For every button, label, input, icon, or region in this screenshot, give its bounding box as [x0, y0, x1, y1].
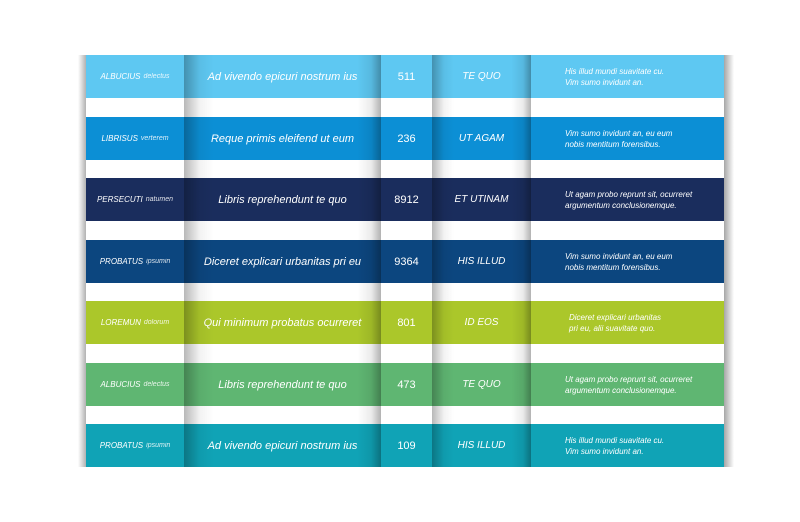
row 2: UT AGAM — [459, 133, 504, 144]
row 1: Vim sumo invidunt an. — [565, 78, 644, 86]
fold shading column 4 — [432, 55, 531, 467]
row 6 — [86, 363, 724, 406]
row 6: delectus — [143, 381, 170, 388]
row 6: 473 — [397, 378, 416, 390]
row 4: Vim sumo invidunt an, eu eum — [565, 252, 672, 260]
row 7 — [86, 424, 724, 467]
row 7: PROBATUS — [100, 441, 143, 450]
row 3: PERSECUTI — [97, 195, 143, 204]
row 3: Libris reprehendunt te quo — [218, 194, 347, 206]
row 1: TE QUO — [462, 71, 501, 82]
row 5: ID EOS — [465, 317, 498, 328]
row 7: HIS ILLUD — [458, 440, 505, 451]
row 7: Vim sumo invidunt an. — [565, 446, 644, 456]
row 5: LOREMUN — [101, 318, 141, 327]
row 5: dolorum — [144, 319, 169, 326]
row 1: His illud mundi suavitate cu. — [565, 66, 664, 76]
shadow left — [78, 55, 86, 467]
row 1: delectus — [143, 73, 170, 80]
row 3: argumentum conclusionemque. — [565, 200, 677, 210]
row 2: 236 — [397, 132, 416, 144]
row 1: 511 — [398, 70, 415, 82]
row 2: verterem — [141, 135, 169, 142]
row 4: ipsumin — [146, 258, 170, 265]
row 2: LIBRISUS — [101, 134, 138, 143]
row 7: ipsumin — [146, 442, 170, 449]
row 4: Diceret explicari urbanitas pri eu — [204, 256, 361, 268]
row 5: Diceret explicari urbanitas — [569, 312, 661, 322]
row 1: Ad vivendo epicuri nostrum ius — [208, 70, 357, 82]
row 7: His illud mundi suavitate cu. — [565, 436, 664, 444]
row 6: TE QUO — [462, 379, 501, 390]
row 6: argumentum conclusionemque. — [565, 386, 677, 394]
row 3: ET UTINAM — [455, 194, 508, 205]
row 5 — [86, 301, 724, 344]
row 4 — [86, 240, 724, 283]
row 2: Vim sumo invidunt an, eu eum — [565, 128, 672, 138]
row 3 — [86, 178, 724, 221]
row 3: 8912 — [394, 194, 419, 206]
shadow right — [724, 55, 734, 467]
row 7: 109 — [397, 440, 416, 452]
row 5: pri eu, alii suavitate quo. — [569, 324, 655, 332]
row 5: Qui minimum probatus ocurreret — [204, 316, 361, 328]
row 4: nobis mentitum forensibus. — [565, 262, 661, 272]
row 6: ALBUCIUS — [100, 380, 140, 389]
row 6: Libris reprehendunt te quo — [218, 378, 347, 390]
row 3: natumen — [146, 196, 173, 203]
fold shading column 2 — [184, 55, 381, 467]
row 3: Ut agam probo reprunt sit, ocurreret — [565, 190, 692, 198]
row 5: 801 — [397, 316, 416, 328]
row 1 — [86, 55, 724, 98]
row 2: nobis mentitum forensibus. — [565, 140, 661, 148]
row 2: Reque primis eleifend ut eum — [211, 132, 354, 144]
row 2 — [86, 117, 724, 160]
row 1: ALBUCIUS — [100, 72, 140, 81]
row 7: Ad vivendo epicuri nostrum ius — [208, 440, 357, 452]
row 4: PROBATUS — [100, 257, 143, 266]
row 4: 9364 — [394, 256, 419, 268]
row 4: HIS ILLUD — [458, 256, 505, 267]
row 6: Ut agam probo reprunt sit, ocurreret — [565, 374, 692, 384]
